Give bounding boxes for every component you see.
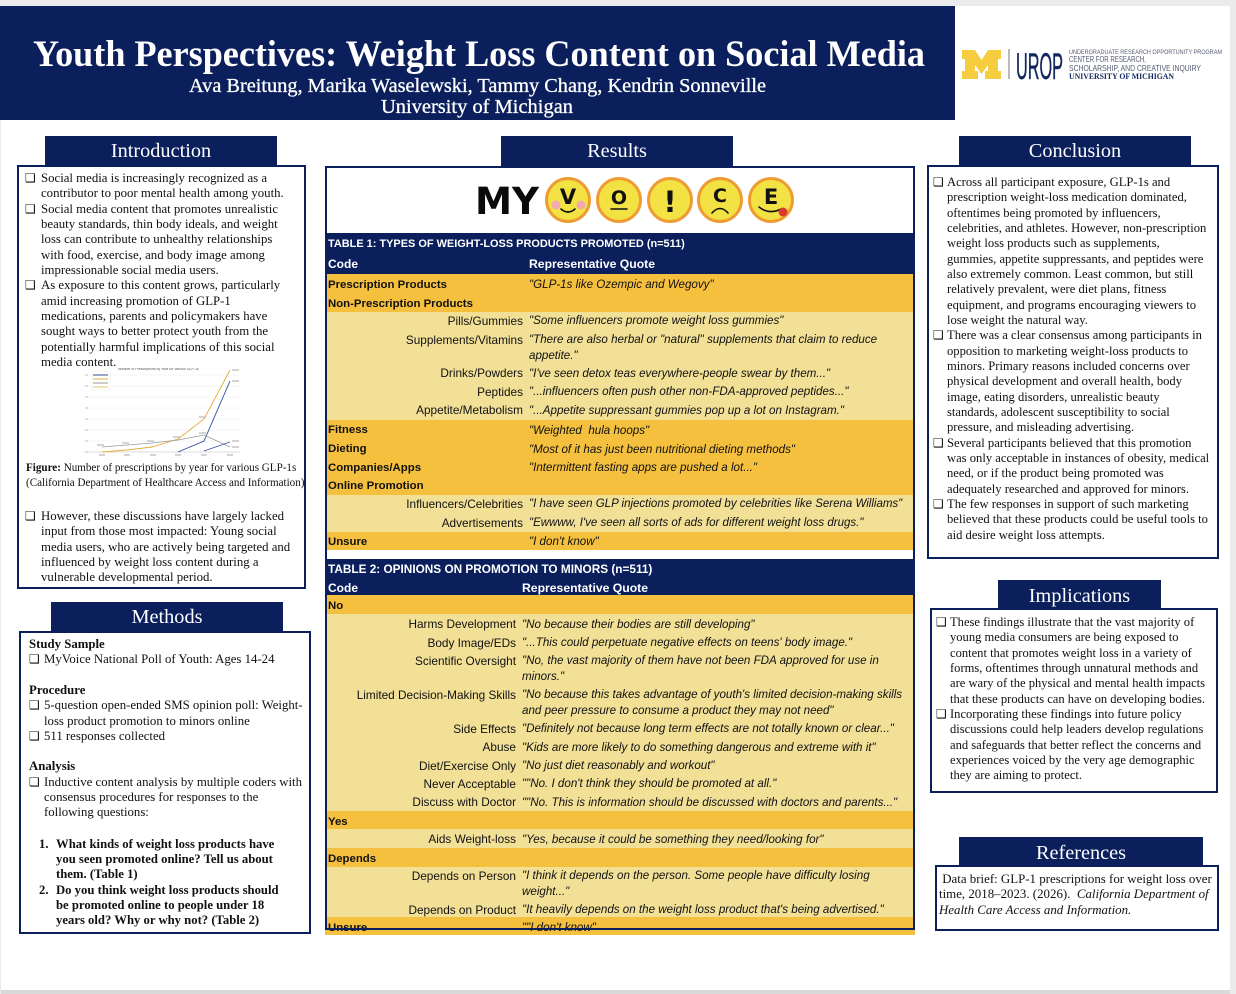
research questions: 2. [39, 883, 49, 897]
logo: MyVoice: V [560, 185, 577, 209]
procedure: ❑ [29, 698, 40, 712]
panel: introduction [17, 165, 306, 589]
conclusion bullets: pressure, and misleading advertising. [947, 420, 1134, 434]
table 2: opinions on promotion to minors: "It heavily depends on the weight loss product that's being advertised." [522, 903, 884, 916]
table 1: weight-loss products: Peptides [477, 385, 523, 399]
intro bullets: contributor to poor mental health among youth. [41, 186, 284, 200]
intro bullets: ❑ [25, 171, 36, 185]
intro bullets [25, 171, 284, 369]
table 2: opinions on promotion to minors: "No just diet reasonably and workout" [522, 759, 715, 772]
conclusion bullets: Across all participant exposure, GLP-1s and [947, 175, 1170, 189]
research questions: you seen promoted online? Tell us about [56, 852, 273, 866]
program name: SCHOLARSHIP, AND CREATIVE INQUIRY [1069, 63, 1201, 73]
implications bullets: content that promotes weight loss in a variety of [950, 646, 1192, 660]
table 2: opinions on promotion to minors: Diet/Exercise Only [419, 759, 516, 773]
table 2 title [325, 559, 915, 578]
intro bullets: Social media is increasingly recognized as a [41, 171, 267, 185]
table 1 column headers: Representative Quote [529, 257, 655, 271]
implications bullets: and safeguards that better reflect the concerns and [950, 738, 1201, 752]
logo: Michigan UROP [962, 46, 1222, 87]
implications bullets: ❑ [936, 615, 947, 629]
study sample: Study Sample [29, 637, 105, 651]
table 1: weight-loss products: "Intermittent fasting apps are pushed a lot..." [529, 461, 757, 474]
figure caption: (California Department of Healthcare Access and Information) [26, 477, 304, 489]
analysis [29, 759, 302, 819]
conclusion bullets: prescription weight-loss medication dominated, [947, 190, 1187, 204]
table 2: opinions on promotion to minors: Body Image/EDs [427, 636, 516, 650]
table 1 title: TABLE 1: TYPES OF WEIGHT-LOSS PRODUCTS PROMOTED (n=511) [328, 238, 685, 250]
table 2: opinions on promotion to minors: "No because this takes advantage of youth's limited decision-making skills [522, 688, 902, 701]
intro bullets: media content. [41, 355, 116, 369]
conclusion bullets: relatively prevalent, were diet plans, fitness [947, 282, 1166, 296]
table 1: weight-loss products: "...influencers often push other non-FDA-approved peptides..." [529, 385, 849, 398]
heading: References: References [1036, 842, 1126, 864]
heading: Introduction [45, 136, 277, 166]
panel: methods [19, 631, 311, 934]
table 1: weight-loss products: "GLP-1s like Ozempic and Wegovy" [529, 278, 714, 291]
table 2: opinions on promotion to minors: Aids Weight-loss [428, 832, 516, 846]
closing bullet: input from those most impacted: Young social [41, 524, 277, 538]
table 2: opinions on promotion to minors: Unsure [328, 922, 367, 934]
study sample: MyVoice National Poll of Youth: Ages 14-24 [44, 652, 274, 666]
table 1 title [325, 233, 915, 253]
conclusion bullets: weight loss products such as supplements, [947, 236, 1160, 250]
implications bullets: are wary of the physical and mental health impacts [950, 676, 1205, 690]
procedure [29, 683, 303, 743]
heading: Results: Results [587, 140, 647, 162]
table 2: opinions on promotion to minors: Depends on Person [412, 869, 516, 883]
conclusion bullets: lose weight the natural way. [947, 313, 1088, 327]
research questions: Do you think weight loss products should [56, 883, 279, 897]
table 1: weight-loss products: Companies/Apps [328, 462, 421, 474]
conclusion bullets: was only acceptable in instances of obesity, medical [947, 451, 1209, 465]
research questions: years old? Why or why not? (Table 2) [56, 913, 259, 927]
closing bullet: However, these discussions have largely lacked [41, 509, 284, 523]
table 1: weight-loss products: Dieting [328, 443, 367, 455]
logo: MyVoice: MY [475, 180, 540, 223]
table 1: weight-loss products: Drinks/Powders [440, 366, 523, 380]
intro bullets: sought ways to better protect youth from the [41, 324, 268, 338]
heading: Conclusion: Conclusion [1029, 140, 1121, 162]
research questions: them. (Table 1) [56, 867, 138, 881]
implications bullets: discussions could help leaders develop regulations [950, 722, 1203, 736]
intro bullets: with food, exercise, and body image among [41, 248, 265, 262]
table 2: opinions on promotion to minors: Harms Development [408, 617, 516, 631]
table 1: weight-loss products: Pills/Gummies [448, 314, 523, 328]
reference text: Data brief: GLP-1 prescriptions for weight loss over [942, 872, 1212, 886]
conclusion bullets: standards, adolescent susceptibility to social [947, 405, 1170, 419]
conclusion bullets: oftentimes being promoted by influencers, [947, 206, 1161, 220]
table 1: weight-loss products: "Most of it has just been nutritional dieting methods" [529, 443, 795, 456]
analysis: ❑ [29, 775, 40, 789]
table 2: opinions on promotion to minors: Scientific Oversight [415, 654, 516, 668]
table 1: weight-loss products: Online Promotion [328, 480, 424, 492]
table 2: opinions on promotion to minors: Never Acceptable [424, 777, 516, 791]
icon: block M [962, 50, 1001, 79]
table 1: weight-loss products: appetite." [529, 349, 578, 362]
heading: Conclusion [959, 136, 1191, 166]
table 2: opinions on promotion to minors: Discuss with Doctor [412, 795, 516, 809]
panel: implications [930, 608, 1218, 793]
title banner [0, 6, 955, 120]
closing bullet [25, 509, 290, 584]
conclusion bullets: opposition to marketing weight-loss products to [947, 344, 1188, 358]
heading: Introduction: Introduction [111, 140, 211, 162]
study sample: ❑ [29, 652, 40, 666]
procedure: ❑ [29, 729, 40, 743]
procedure: 511 responses collected [44, 729, 165, 743]
conclusion bullets: equipment, and programs encouraging viewers to [947, 298, 1196, 312]
conclusion bullets: There was a clear consensus among participants in [947, 328, 1202, 342]
table 1 column headers: Code [328, 257, 358, 271]
procedure: 5-question open-ended SMS opinion poll: Weight- [44, 698, 303, 712]
table 2: opinions on promotion to minors [325, 559, 915, 935]
table 1: weight-loss products: "...Appetite suppressant gummies pop up a lot on Instagram." [529, 404, 844, 417]
table 1: weight-loss products: Appetite/Metabolism [416, 403, 523, 417]
table 1: weight-loss products [327, 233, 913, 550]
conclusion bullets: aid desire weight loss attempts. [947, 528, 1105, 542]
table 1: weight-loss products: "I don't know" [529, 535, 599, 548]
table 1: weight-loss products: "Ewwww, I've seen all sorts of ads for different weight loss drugs." [529, 517, 863, 529]
logo: Michigan UROP: UROP [1016, 46, 1063, 87]
implications bullets: young media consumers are being exposed to [950, 630, 1179, 644]
conclusion bullets: physical development and overall health, body [947, 374, 1182, 388]
title: Youth Perspectives: Weight Loss Content on Social Media [33, 34, 925, 75]
conclusion bullets: ❑ [933, 175, 944, 189]
table 1: weight-loss products: Supplements/Vitamins [406, 333, 523, 347]
table 1: weight-loss products: Advertisements [442, 516, 523, 530]
conclusion bullets: need, or if the product being promoted was [947, 466, 1164, 480]
panel: references [935, 865, 1219, 931]
line chart: GLP-1 prescriptions [85, 368, 240, 456]
logo: MyVoice: O [611, 187, 627, 209]
table 2: opinions on promotion to minors: Abuse [483, 740, 516, 754]
intro bullets: potentially harmful implications of this social [41, 340, 274, 354]
conclusion bullets: adequately researched and approved for minors. [947, 482, 1189, 496]
table 2: opinions on promotion to minors: ""No. This is information should be discussed with doctors and parents..." [522, 796, 897, 809]
table 2: opinions on promotion to minors: "Definitely not because long term effects are not totally known or clear..." [522, 722, 894, 735]
table 2: opinions on promotion to minors: weight..." [522, 885, 569, 898]
analysis: following questions: [44, 805, 149, 819]
table 2: opinions on promotion to minors: "I think it depends on the person. Some people have difficulty losing [522, 869, 870, 882]
panel outline: results [325, 166, 915, 930]
table 2 column headers [325, 578, 915, 595]
panel: conclusion [927, 165, 1219, 559]
table 2: opinions on promotion to minors: "...This could perpetuate negative effects on teens' body image." [522, 636, 852, 649]
conclusion bullets: image, eating disorders, unrealistic beauty [947, 390, 1160, 404]
intro bullets: loss can contribute to unhealthy relationships [41, 232, 272, 246]
table 1: weight-loss products: Prescription Products [328, 279, 447, 291]
table 2: opinions on promotion to minors: "No because their bodies are still developing" [522, 618, 755, 631]
implications bullets: Incorporating these findings into future policy [950, 707, 1182, 721]
reference text [938, 872, 1212, 917]
intro bullets: beauty standards, thin body ideals, and weight [41, 217, 278, 231]
logo: MyVoice: C [713, 185, 727, 207]
table 2: opinions on promotion to minors: ""I don't know" [522, 921, 596, 934]
table 1: weight-loss products: "There are also herbal or "natural" supplements that claim to reduce [529, 333, 877, 346]
table 2: opinions on promotion to minors: No [328, 600, 343, 612]
analysis: consensus procedures for responses to the [44, 790, 258, 804]
table 2: opinions on promotion to minors: Yes [328, 816, 348, 828]
closing bullet: media users, who are actively being targeted and [41, 540, 290, 554]
closing bullet: ❑ [25, 509, 36, 523]
table 1: weight-loss products: Fitness [328, 424, 368, 436]
table 2: opinions on promotion to minors: Depends on Product [408, 903, 516, 917]
implications bullets: forms, oftentimes through unnatural methods and [950, 661, 1198, 675]
closing bullet: influenced by weight loss content during a [41, 555, 258, 569]
table 2: opinions on promotion to minors: ""No. I don't think they should be promoted at all." [522, 777, 776, 790]
heading: Methods [51, 602, 283, 632]
table 2: opinions on promotion to minors: Side Effects [453, 722, 516, 736]
procedure: loss product promotion to minors online [44, 714, 250, 728]
table 1: weight-loss products: "I've seen detox teas everywhere-people swear by them..." [529, 367, 830, 380]
table 2: opinions on promotion to minors: minors." [522, 670, 564, 683]
closing bullet: vulnerable developmental period. [41, 570, 213, 584]
program name [1069, 49, 1222, 81]
table 1: weight-loss products: "I have seen GLP injections promoted by celebrities like Serena Williams" [529, 498, 902, 510]
authors: Ava Breitung, Marika Waselewski, Tammy Chang, Kendrin Sonneville [189, 75, 766, 97]
implications bullets: that these products can have on developing bodies. [950, 692, 1205, 706]
program name: UNIVERSITY OF MICHIGAN [1069, 72, 1174, 81]
reference text: time, 2018–2023. (2026). California Department of [939, 887, 1209, 901]
table 2 title: TABLE 2: OPINIONS ON PROMOTION TO MINORS (n=511) [328, 562, 652, 576]
table 1 column headers [325, 253, 915, 274]
research questions: What kinds of weight loss products have [56, 837, 274, 851]
intro bullets: As exposure to this content grows, particularly [41, 278, 280, 292]
table 1: weight-loss products: "Weighted hula hoops" [529, 424, 649, 437]
intro bullets: ❑ [25, 202, 36, 216]
implications bullets: These findings illustrate that the vast majority of [950, 615, 1194, 629]
conclusion bullets: ❑ [933, 497, 944, 511]
table 2: opinions on promotion to minors: Limited Decision-Making Skills [357, 688, 516, 702]
intro bullets: medications, parents and policymakers have [41, 309, 267, 323]
reference text: Health Care Access and Information. [939, 903, 1131, 917]
table 2: opinions on promotion to minors: "Kids are more likely to do something dangerous and extreme with it" [522, 741, 876, 754]
logo: MyVoice: ! [663, 185, 677, 219]
table 1: weight-loss products: "Some influencers promote weight loss gummies" [529, 314, 783, 327]
table 1: weight-loss products: Unsure [328, 536, 367, 548]
conclusion bullets: ❑ [933, 436, 944, 450]
table 2 column headers: Representative Quote [522, 581, 648, 595]
implications bullets: experiences voiced by the very age demographic [950, 753, 1195, 767]
intro bullets: ❑ [25, 278, 36, 292]
table 1: weight-loss products: Non-Prescription Products [328, 298, 473, 310]
research questions: 1. [39, 837, 49, 851]
table 2: opinions on promotion to minors: and peer pressure to consume a product they may not need" [522, 704, 834, 717]
table 2: opinions on promotion to minors: "No, the vast majority of them have not been FDA approved for use in [522, 654, 879, 667]
procedure: Procedure [29, 683, 85, 697]
figure caption [26, 462, 304, 489]
heading: Implications [998, 580, 1161, 610]
affiliation: University of Michigan [381, 96, 573, 118]
intro bullets: amid increasing promotion of GLP-1 [41, 294, 231, 308]
table 1: weight-loss products: Influencers/Celebrities [406, 497, 523, 511]
conclusion bullets: ❑ [933, 328, 944, 342]
conclusion bullets: celebrities, and athletes. However, non-prescription [947, 221, 1206, 235]
implications bullets: ❑ [936, 707, 947, 721]
analysis: Inductive content analysis by multiple coders with [44, 775, 302, 789]
conclusion bullets [933, 175, 1209, 542]
implications bullets: they are aiming to protect. [950, 768, 1082, 782]
program name: CENTER FOR RESEARCH, [1069, 54, 1146, 64]
logo: MyVoice [475, 177, 794, 223]
conclusion bullets: Several participants believed that this promotion [947, 436, 1191, 450]
research questions: be promoted online to people under 18 [56, 898, 264, 912]
intro bullets: impressionable social media users. [41, 263, 219, 277]
conclusion bullets: The few responses in support of such marketing [947, 497, 1189, 511]
analysis: Analysis [29, 759, 75, 773]
implications bullets [936, 615, 1205, 782]
table 2: opinions on promotion to minors: "Yes, because it could be something they need/looking for" [522, 833, 824, 846]
conclusion bullets: believed that these products could be useful tools to [947, 512, 1208, 526]
heading: Results [501, 136, 733, 166]
heading: Methods: Methods [132, 606, 202, 628]
figure caption: Figure: Number of prescriptions by year for various GLP-1s [26, 462, 296, 474]
conclusion bullets: also extremely common. Least common, but still [947, 267, 1193, 281]
logo: MyVoice: E [764, 185, 778, 209]
study sample [29, 637, 274, 666]
table 2 column headers: Code [328, 581, 358, 595]
research questions [39, 837, 279, 927]
table 2: opinions on promotion to minors: Depends [328, 853, 376, 865]
heading: Implications: Implications [1029, 585, 1130, 607]
intro bullets: Social media content that promotes unrealistic [41, 202, 278, 216]
heading: References [959, 837, 1203, 867]
conclusion bullets: minors. Primary reasons included concerns over [947, 359, 1190, 373]
conclusion bullets: gummies, appetite suppressants, and peptides were [947, 252, 1203, 266]
